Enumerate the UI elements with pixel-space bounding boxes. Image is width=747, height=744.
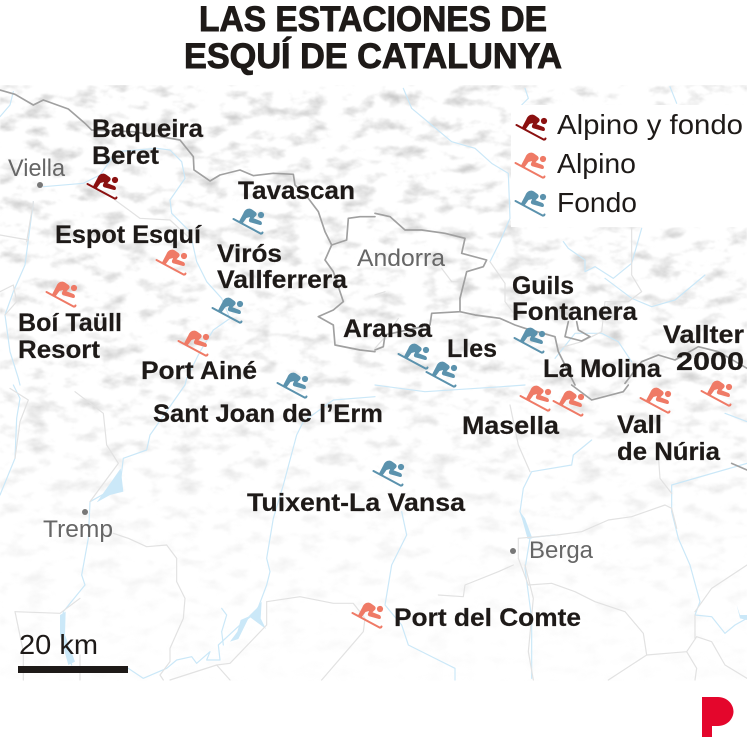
icon: skier cross-country [514,328,545,353]
label: Masella: Masella [462,412,560,440]
label: Boí Taüll Resort: Boí Taüll [18,309,122,337]
label: Vallter 2000: 2000 [676,348,744,376]
icon: skier alpine [520,386,551,411]
label: Vall de Núria: de Núria [617,438,721,466]
station: Tuixent-La Vansa [247,461,466,517]
title: LAS ESTACIONES DE [199,0,547,39]
icon: skier cross-country [234,209,264,234]
city: Berga [510,542,593,563]
label: Tuixent-La Vansa: Tuixent-La Vansa [247,489,466,517]
scale bar: 20 km [19,629,98,660]
rivers and reservoirs [0,87,747,680]
label: Espot Esquí: Espot Esquí [55,221,202,249]
legend item: Fondo [516,187,637,218]
label: Virós Vallferrera: Vallferrera [217,266,348,294]
icon: skier cross-country [398,344,429,369]
icon: skier alpine and cross-country [88,174,118,199]
label: Virós Vallferrera [217,244,348,288]
icon: skier cross-country [278,373,308,398]
icon: skier alpine [178,331,209,356]
logo [702,697,734,737]
legend [511,105,747,227]
label: Port Ainé: Port Ainé [141,357,257,385]
label: Baqueira Beret: Baqueira [92,115,204,143]
legend item: Fondo: Fondo [557,187,637,218]
label: Virós Vallferrera: Virós [217,240,282,268]
label: Aransa: Aransa [343,315,433,343]
station: Tavascan [234,177,355,234]
label: Vall de Núria: Vall [617,411,662,439]
icon: skier alpine [702,381,732,406]
label: La Molina: La Molina [543,355,662,383]
legend item: Alpino [516,148,636,179]
label: Tavascan: Tavascan [238,177,355,205]
label: Baqueira Beret [94,118,204,164]
city: Viella: Viella [8,155,66,182]
label: Vallter 2000 [663,321,744,376]
icon: skier cross-country [212,298,243,323]
international borders [0,90,747,470]
city: Berga: Berga [529,537,594,564]
station: Vall de Núria [617,388,721,466]
region: Andorra: Andorra [357,245,446,272]
label: Guils Fontanera [512,276,638,320]
roads and regional limits [0,200,747,680]
label: Guils Fontanera: Fontanera [512,298,638,326]
label: Boí Taüll Resort: Resort [18,336,101,364]
icon: skier alpine [640,388,671,413]
title [184,0,562,76]
station: Guils Fontanera [512,272,638,353]
station: Sant Joan de l'Erm [154,372,382,422]
station: Aransa [343,315,433,369]
scale bar [18,629,128,673]
label: Port del Comte: Port del Comte [394,604,581,632]
title: ESQUÍ DE CATALUNYA [184,36,562,76]
icon: skier cross-country [374,461,404,486]
station: Virós Vallferrera [212,240,348,323]
city: Tremp: Tremp [43,516,113,543]
label: Vall de Núria [617,411,721,466]
label: Baqueira Beret: Beret [92,142,160,170]
icon: skier alpine [156,250,187,275]
label: Sant Joan de l'Erm: Sant Joan de l’Erm [153,400,383,428]
station: Port Ainé [142,330,256,380]
station: Baqueira Beret [88,115,204,199]
label: Boí Taüll Resort [20,312,120,358]
station: Masella [462,386,560,440]
icon: skier alpine [46,282,77,307]
station: Vallter 2000 [663,321,744,406]
icon: skier alpine [554,391,584,416]
hillshade relief [0,85,747,610]
label: Vallter 2000: Vallter [663,321,744,349]
station: La Molina [543,355,662,416]
station: Lles [426,335,497,387]
station: Boí Taüll Resort [18,282,122,364]
label: Guils Fontanera: Guils [512,272,574,300]
icon: skier cross-country [426,362,457,387]
station: Espot Esquí [55,221,202,275]
legend item: Alpino y fondo: Alpino y fondo [557,109,743,140]
station: Port del Comte [352,603,581,632]
legend item: Alpino: Alpino [557,148,636,179]
icon: skier alpine [352,603,383,628]
label: Lles: Lles [447,335,497,363]
